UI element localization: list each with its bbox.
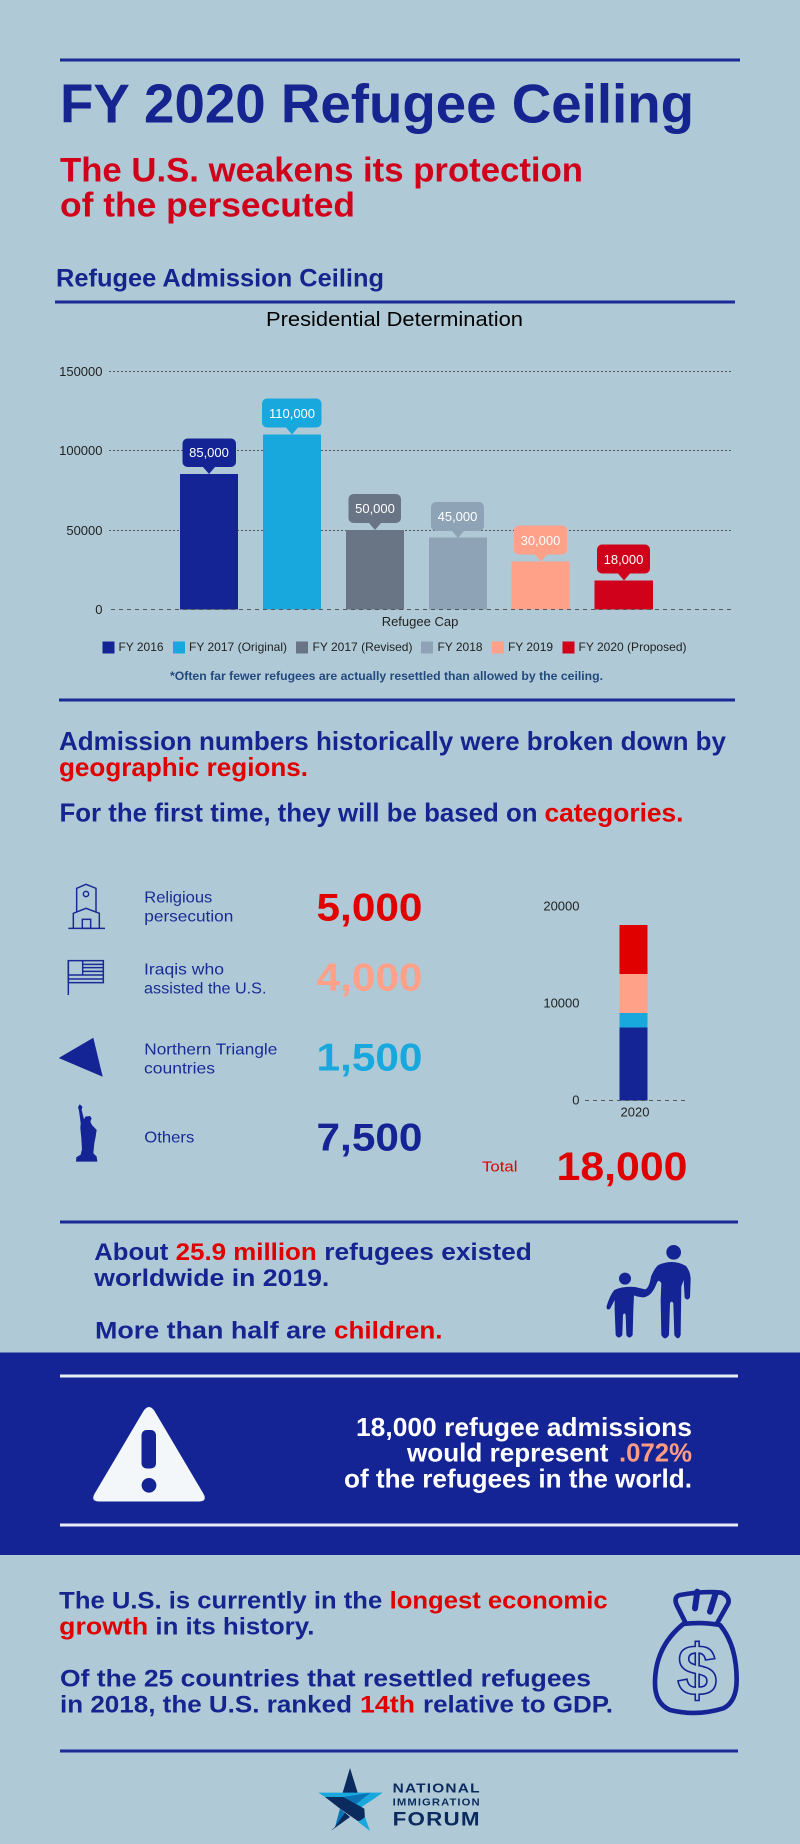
label: iraqis who assisted: Iraqis who [144,961,224,978]
y axis labels: 150000 [59,364,102,379]
callout: 30,000: 30,000 [521,533,560,548]
value: 1,500: 1,500 [316,1036,422,1080]
legend [102,640,687,654]
logo star [318,1768,383,1831]
text block: economy and gdp: in its history. [155,1613,314,1640]
callout: 30,000 [514,526,567,562]
callout: 18,000: 18,000 [604,552,643,567]
bars [180,434,653,610]
label: others: Others [144,1129,194,1146]
label: northern triangle countries [144,1041,277,1077]
value: 7,500: 7,500 [316,1116,422,1160]
logo wordmark [393,1780,481,1831]
legend: FY 2019 [508,640,553,654]
icon: warning triangle [93,1407,205,1502]
stacked bar chart: 2020: 0 [572,1092,580,1108]
text block: economy and gdp [59,1587,613,1719]
stacked bar chart: 2020 [543,898,685,1120]
text block: worldwide refugees: About [94,1239,168,1266]
text block: admission breakdown [59,726,727,828]
text block: worldwide refugees: 25.9 million [176,1239,317,1266]
text block: economy and gdp: growth [59,1613,148,1640]
y axis labels: 0 [95,602,102,617]
text block: admission breakdown: Admission numbers historically were broken down by [59,726,727,756]
icon: money bag [655,1592,737,1713]
subtitle [60,152,583,224]
text block: economy and gdp: in 2018, the U.S. ranked [60,1692,352,1719]
legend: FY 2016 [118,640,164,654]
stacked bar chart: 2020: 2020 [621,1104,649,1120]
y axis labels [59,364,102,617]
chart title: Presidential Determination [266,309,523,331]
callout: 110,000 [262,398,322,434]
text block: economy and gdp: longest economic [390,1587,608,1614]
callout: 45,000 [431,502,484,538]
text block: worldwide refugees: refugees existed [324,1239,532,1266]
callout: 85,000 [182,438,236,474]
value: 4,000: 4,000 [316,956,422,1000]
label: religious persecution: persecution [144,908,233,925]
callout: 50,000 [348,494,401,530]
bar chart: refugee cap by year [59,364,731,654]
subtitle: of the persecuted [60,186,355,224]
footnote: *Often far fewer refugees are actually resettled than allowed by the ceiling. [170,669,603,683]
icon: adult and child [607,1245,691,1338]
text block: admission breakdown: geographic regions. [59,752,308,782]
label: northern triangle countries: countries [144,1060,215,1077]
x axis label: Refugee Cap [382,614,458,629]
text block: economy and gdp: relative to GDP. [423,1692,613,1719]
callout: 85,000: 85,000 [189,445,229,460]
icon: northern triangle [59,1038,103,1077]
callout: 50,000: 50,000 [355,501,395,516]
label: iraqis who assisted: assisted the U.S. [144,980,266,997]
text block: worldwide refugees: More than half are [95,1317,326,1344]
title: FY 2020 Refugee Ceiling [60,72,694,134]
logo: national immigration forum [318,1768,481,1831]
statement: .072% [619,1438,692,1468]
text block: economy and gdp: Of the 25 countries that resettled refugees [60,1666,591,1693]
value: 5,000: 5,000 [316,886,422,930]
stacked bar chart: 2020: 10000 [543,996,580,1010]
icon: place of worship [68,884,105,928]
text block: admission breakdown: categories. [544,798,684,828]
callout: 45,000: 45,000 [438,509,477,524]
logo wordmark: FORUM [393,1810,481,1831]
legend: FY 2018 [438,640,483,654]
logo wordmark: IMMIGRATION [393,1797,481,1809]
label: northern triangle countries: Northern Triangle [144,1041,277,1058]
legend: FY 2020 (Proposed) [578,640,687,654]
text block: economy and gdp: 14th [360,1692,415,1719]
text block: worldwide refugees [93,1239,532,1344]
callout: 18,000 [597,544,650,580]
icon: money bag: $ [677,1631,717,1711]
heading: refugee admission ceiling: Refugee Admission Ceiling [56,264,384,292]
label: iraqis who assisted [144,961,266,997]
label: religious persecution: Religious [144,889,212,906]
icon: statue of liberty [76,1104,97,1162]
statement [344,1412,692,1494]
panel: share of world refugees [0,1352,800,1555]
statement: 18,000 refugee admissions [356,1412,692,1442]
text block: admission breakdown: For the first time, they will be based on [60,798,538,828]
stacked bar chart: 2020: 20000 [543,898,580,914]
legend: FY 2017 (Revised) [312,640,413,654]
statement: would represent [406,1438,609,1468]
logo wordmark: NATIONAL [393,1780,481,1795]
icon: us flag [68,960,103,995]
subtitle: The U.S. weakens its protection [60,152,583,190]
statement: of the refugees in the world. [344,1464,692,1494]
total [482,1145,688,1189]
callout: 110,000: 110,000 [269,406,315,421]
text block: worldwide refugees: worldwide in 2019. [93,1265,329,1292]
total: Total [482,1158,518,1176]
y axis labels: 50000 [66,523,102,538]
legend: FY 2017 (Original) [189,640,287,654]
text block: economy and gdp: The U.S. is currently in the [59,1587,382,1614]
text block: worldwide refugees: children. [334,1317,442,1344]
y axis labels: 100000 [59,443,102,458]
label: religious persecution [144,889,233,925]
total: 18,000 [556,1145,688,1189]
